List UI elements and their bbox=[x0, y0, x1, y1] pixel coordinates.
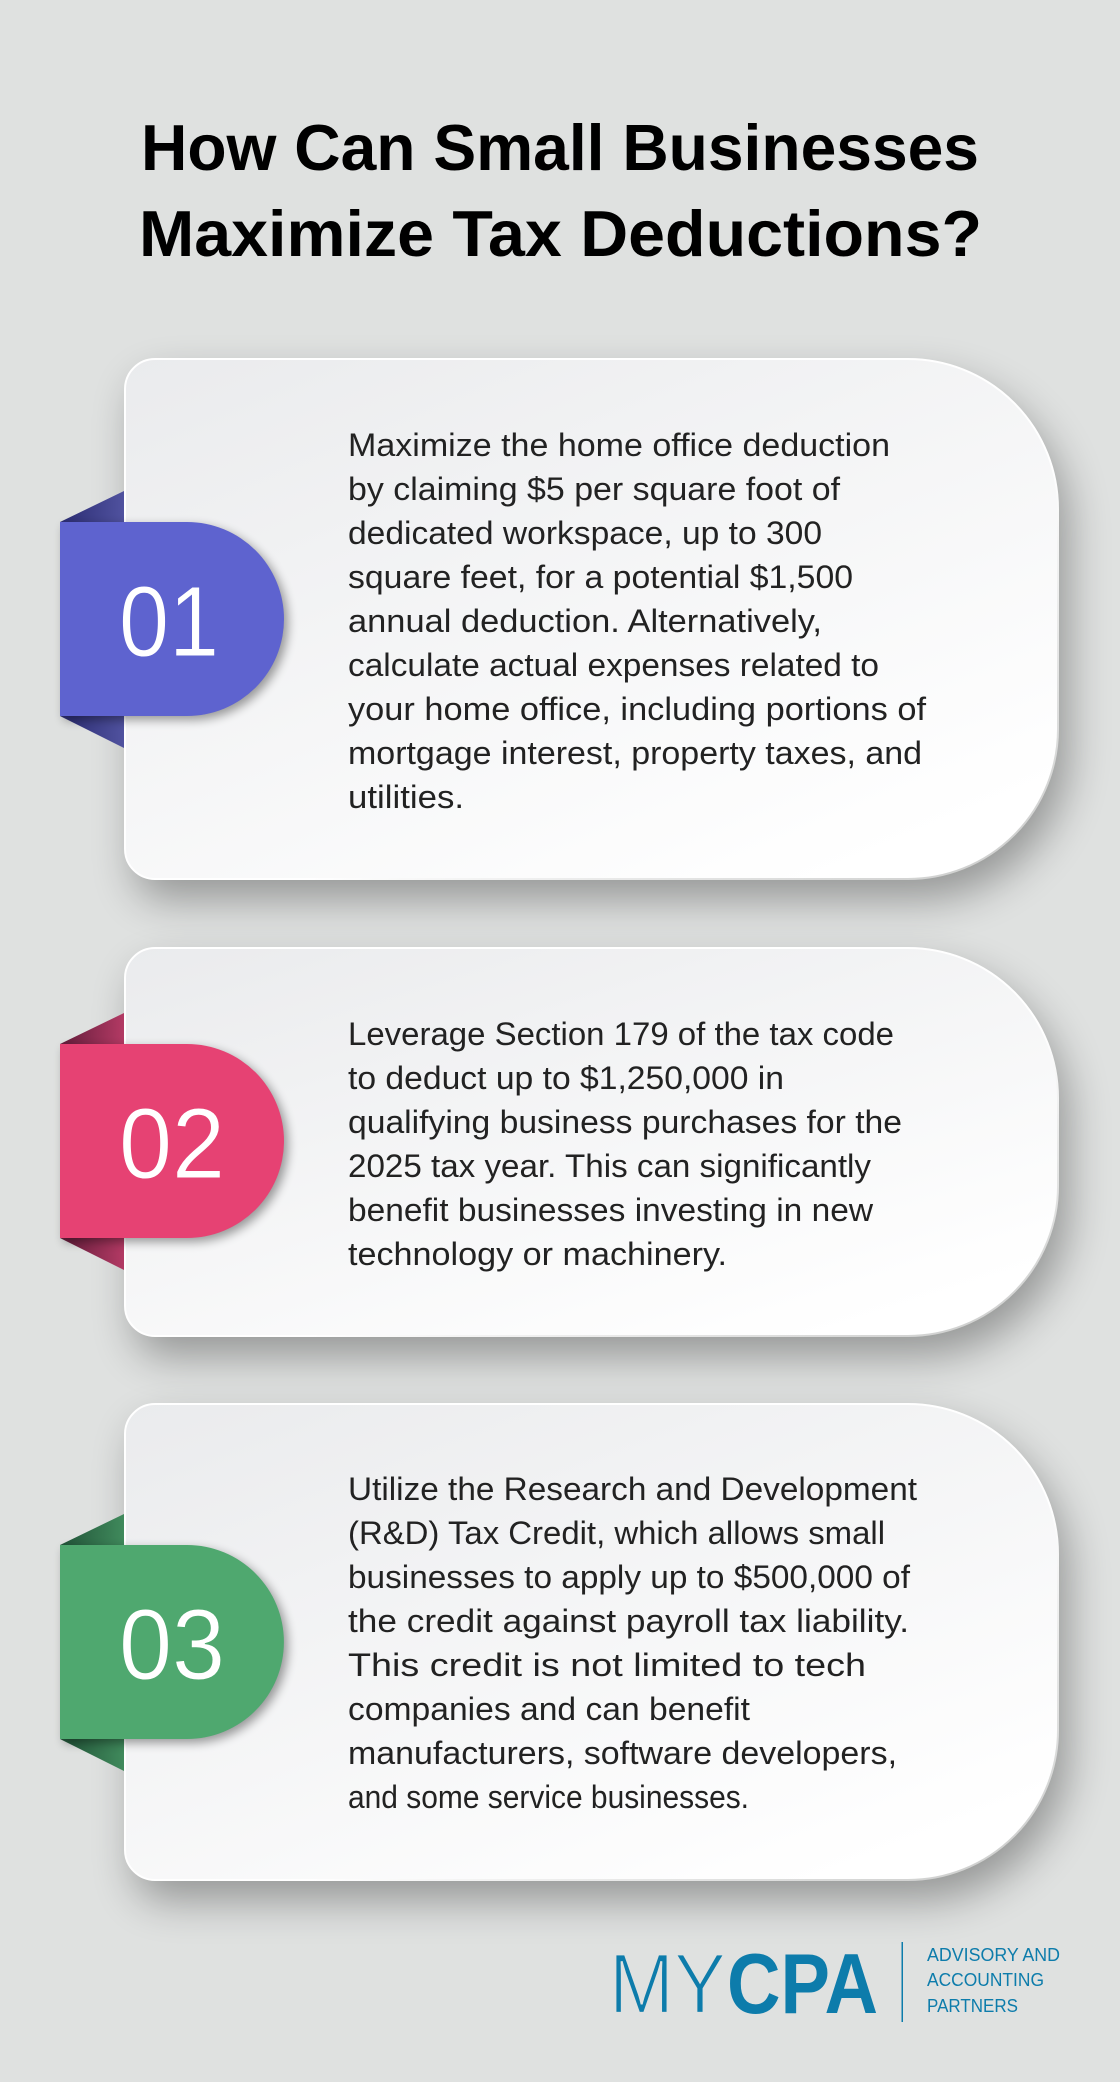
body text 02: benefit businesses investing in new bbox=[348, 1192, 874, 1228]
body text 03: manufacturers, software developers, bbox=[348, 1735, 897, 1771]
logo wordmark: MY bbox=[609, 1937, 726, 2032]
body text 03: (R&D) Tax Credit, which allows small bbox=[348, 1515, 885, 1551]
body text 02: Leverage Section 179 of the tax code bbox=[348, 1016, 894, 1052]
body text 02: qualifying business purchases for the bbox=[348, 1104, 902, 1140]
body text 01: square feet, for a potential $1,500 bbox=[348, 559, 853, 595]
body text 03: the credit against payroll tax liability. bbox=[348, 1603, 909, 1639]
body text 03: companies and can benefit bbox=[348, 1691, 750, 1727]
logo tagline: PARTNERS bbox=[927, 1996, 1018, 2016]
body text 01: utilities. bbox=[348, 779, 464, 815]
title bbox=[139, 111, 982, 270]
badge 03: 03 bbox=[119, 1589, 225, 1701]
body text 01 bbox=[348, 427, 926, 815]
body text 01: calculate actual expenses related to bbox=[348, 647, 879, 683]
badge 02 bbox=[60, 1013, 288, 1270]
badge 02: 02 bbox=[119, 1088, 225, 1200]
body text 02: to deduct up to $1,250,000 in bbox=[348, 1060, 784, 1096]
body text 02 bbox=[348, 1016, 902, 1272]
body text 01: dedicated workspace, up to 300 bbox=[348, 515, 822, 551]
logo tagline: ADVISORY AND bbox=[927, 1945, 1060, 1965]
body text 03: and some service businesses. bbox=[348, 1779, 749, 1815]
badge 01 bbox=[60, 491, 288, 748]
body text 02: technology or machinery. bbox=[348, 1236, 727, 1272]
body text 03: Utilize the Research and Development bbox=[348, 1471, 917, 1507]
body text 01: by claiming $5 per square foot of bbox=[348, 471, 840, 507]
body text 03: This credit is not limited to tech bbox=[348, 1647, 866, 1683]
body text 01: your home office, including portions of bbox=[348, 691, 926, 727]
panel: step 03 R&D tax credit bbox=[60, 1404, 1068, 1900]
logo wordmark bbox=[609, 1937, 878, 2032]
body text 01: Maximize the home office deduction bbox=[348, 427, 890, 463]
logo tagline: ACCOUNTING bbox=[927, 1970, 1044, 1990]
logo tagline bbox=[927, 1945, 1060, 2016]
title: How Can Small Businesses bbox=[141, 111, 979, 184]
body text 03: businesses to apply up to $500,000 of bbox=[348, 1559, 910, 1595]
body text 02: 2025 tax year. This can significantly bbox=[348, 1148, 871, 1184]
body text 01: annual deduction. Alternatively, bbox=[348, 603, 822, 639]
panel: step 01 home office deduction bbox=[60, 359, 1068, 899]
body text 03 bbox=[348, 1471, 917, 1815]
body text 01: mortgage interest, property taxes, and bbox=[348, 735, 922, 771]
logo: MyCPA bbox=[609, 1937, 1060, 2032]
badge 03 bbox=[60, 1514, 288, 1771]
badge 01: 01 bbox=[119, 566, 219, 678]
panel: step 02 section 179 bbox=[60, 948, 1068, 1356]
logo wordmark: CPA bbox=[727, 1937, 878, 2032]
title: Maximize Tax Deductions? bbox=[139, 197, 982, 270]
